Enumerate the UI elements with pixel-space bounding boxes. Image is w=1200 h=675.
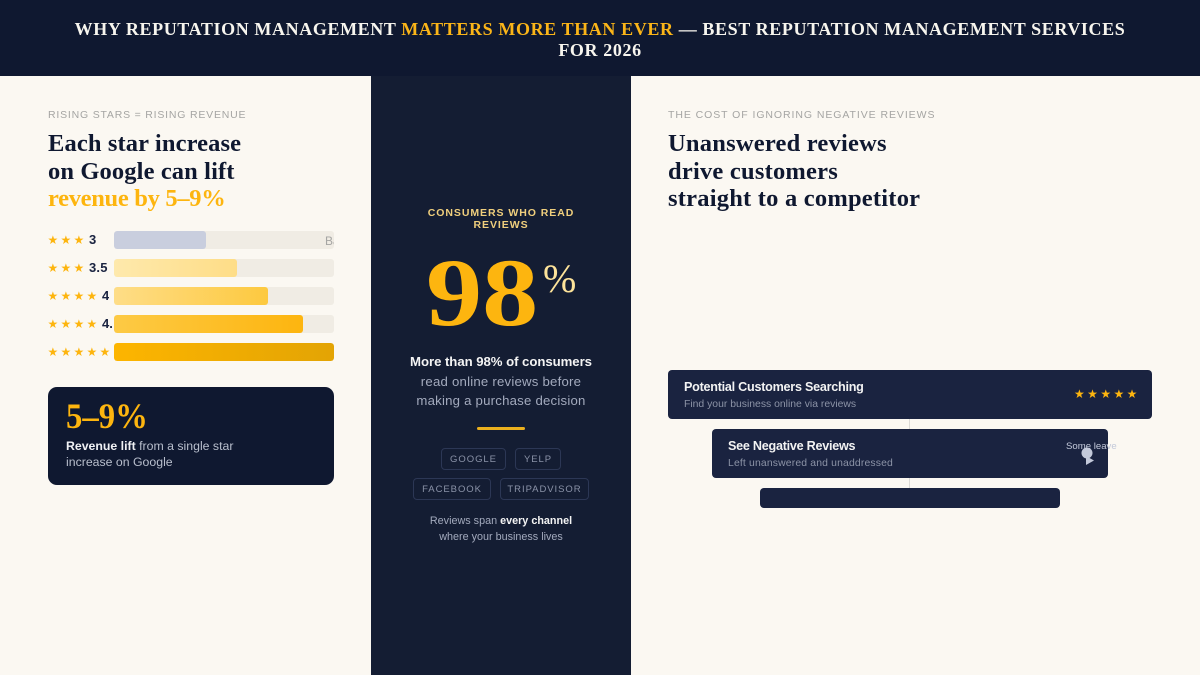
bar row: 3.5 stars: 3.5 [89,260,108,275]
heading: unanswered reviews: Unanswered reviews [668,130,887,157]
tag: Facebook: FACEBOOK [422,484,482,495]
stage 2 overflow label: Some leave [1066,441,1117,452]
icon: pin marker [1082,448,1094,465]
bar row: 4 stars [48,287,334,305]
funnel stage 1 [668,370,1152,419]
panel: consumers who read reviews [371,76,631,675]
stat description [410,354,592,408]
bar row: 3.5 stars [48,259,334,277]
big stat: 98 percent: 98 [426,239,538,346]
callout number: 5–9% [66,396,148,436]
funnel diagram [668,370,1152,508]
stage 1 subtitle: Find your business online via reviews [684,399,856,410]
stat description: making a purchase decision [416,393,586,408]
heading: unanswered reviews [668,130,920,212]
title: FOR 2026 [558,40,642,60]
channel note [430,515,572,542]
channel note: where your business lives [439,530,563,542]
heading: star increase: Each star increase [48,130,241,157]
heading: star increase: on Google can lift [48,158,235,184]
bar row: 4.5 stars [48,315,334,333]
bar row: 5 stars [48,343,334,361]
callout text: increase on Google [66,455,173,469]
title: WHY REPUTATION MANAGEMENT MATTERS MORE THAN EVER — BEST REPUTATION MANAGEMENT SERVICES [75,19,1125,39]
tag: TripAdvisor [500,478,589,500]
tag: Google [441,448,506,470]
eyebrow: rising stars: RISING STARS = RISING REVENUE [48,109,246,121]
tag: Yelp: YELP [524,454,552,465]
header banner [0,0,1200,76]
stage 2 subtitle: Left unanswered and unaddressed [728,458,893,469]
bar chart: revenue by star rating [48,231,334,361]
bar row: 3 stars [48,231,334,249]
panel: rising stars [48,109,246,212]
bar row: 4 stars: 4 [102,288,109,303]
tag: Google: GOOGLE [450,454,497,465]
heading: star increase: revenue by 5–9% [48,185,225,212]
title [74,19,1125,60]
stat description: read online reviews before [421,374,581,388]
bar row: 4.5 stars: ★★★★ [48,316,100,330]
callout text: Revenue lift from a single star [66,439,233,453]
bar row: 3.5 stars: ★★★ [48,260,87,274]
callout text [66,439,234,469]
funnel stage 3 [760,488,1060,508]
callout: revenue lift [48,387,334,485]
eyebrow: consumers: REVIEWS [473,219,529,231]
heading: unanswered reviews: straight to a competitor [668,185,920,212]
tag: Facebook [413,478,491,500]
percent sign: % [543,256,576,301]
eyebrow: consumers: CONSUMERS WHO READ [428,207,574,219]
tag: TripAdvisor: TRIPADVISOR [507,484,582,495]
funnel stage 2 [712,429,1108,478]
tags: review channels [413,448,589,500]
eyebrow: cost: THE COST OF IGNORING NEGATIVE REVIEWS [668,109,935,121]
stage 1 stars: ★★★★★ [1074,387,1140,401]
bar row: 4 stars: ★★★★ [48,288,100,302]
tag: Yelp [515,448,561,470]
channel note: Reviews span every channel [430,515,572,527]
gold divider [477,427,525,430]
stat description: More than 98% of consumers [410,354,592,369]
bar row: 5 stars: ★★★★★ [48,344,113,358]
bar row: 3 stars: 3 [89,232,96,247]
panel: cost of ignoring reviews [668,109,935,212]
eyebrow: consumers [428,207,574,231]
heading: star increase [48,130,241,212]
heading: unanswered reviews: drive customers [668,158,838,184]
bar row: 3 stars: ★★★ [48,232,87,246]
stage 2 title: See Negative Reviews [728,439,855,453]
stage 1 title: Potential Customers Searching [684,380,864,394]
connector line [909,419,910,489]
